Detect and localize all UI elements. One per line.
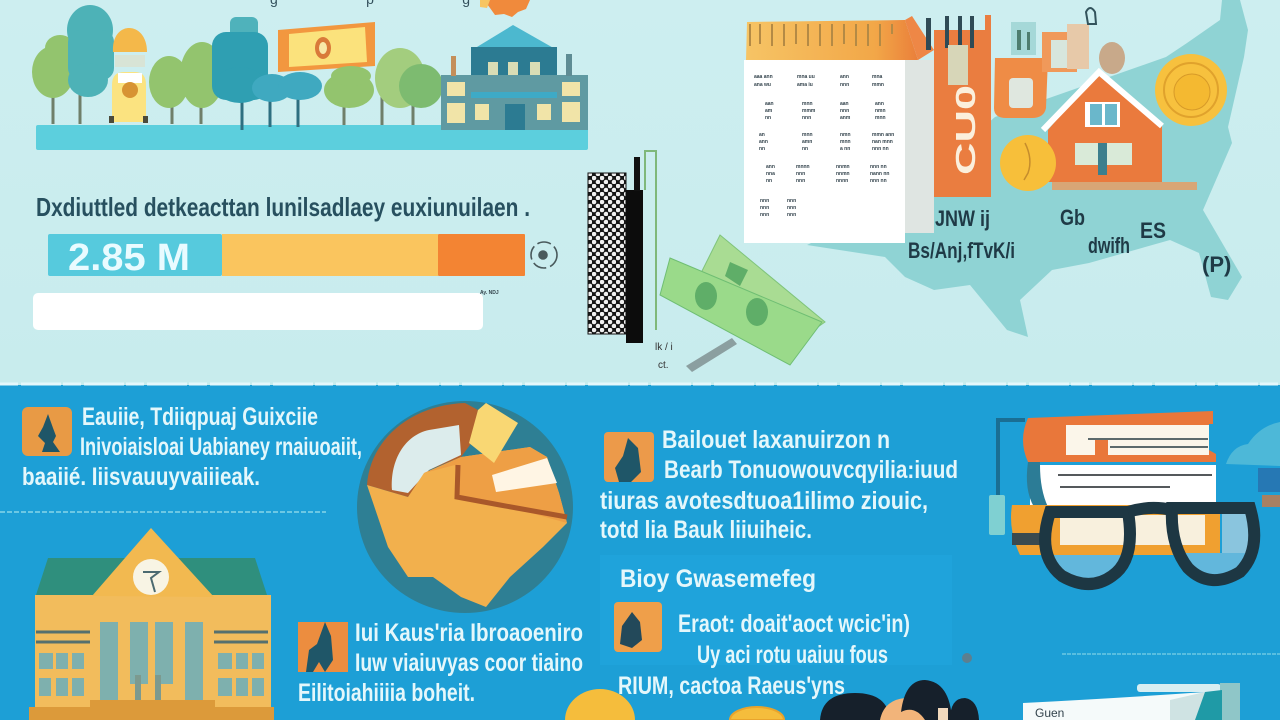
tree trunks <box>53 90 413 130</box>
text: Uy aci rotu uaiuu fous <box>697 641 888 669</box>
icon: orange gear <box>480 0 530 17</box>
bar value: 2.85 M <box>68 237 190 279</box>
text: Eraot: doait'aoct wcic'in) <box>678 610 910 638</box>
calendar table text: nnn <box>787 198 796 204</box>
white book <box>1027 462 1216 507</box>
map labels: Gb <box>1060 205 1085 230</box>
text: Bearb Tonuowouvcqyilia:iuud <box>664 456 958 484</box>
school roof <box>36 558 267 595</box>
calendar table text: ann <box>766 164 775 170</box>
text: tiuras avotesdtuoa1ilimo ziouic, <box>600 487 928 515</box>
panel: statistic bar <box>33 192 557 330</box>
calendar table text: nn <box>759 146 765 152</box>
calendar table text: nmn <box>875 108 886 114</box>
calendar table text: nnn <box>760 198 769 204</box>
calendar table text: nnn <box>787 205 796 211</box>
heading: Dxdiuttled detkeacttan lunilsadlaey euxiunuilaen . <box>36 192 530 222</box>
small scribble circle: ct. <box>658 360 669 371</box>
small city icons <box>994 8 1125 118</box>
school pediment <box>92 528 214 597</box>
orange book <box>1023 411 1216 462</box>
teal shrub <box>252 72 322 102</box>
calendar table text: ama iu <box>797 82 813 88</box>
calendar table text: ann <box>840 74 849 80</box>
icon: small gold coin <box>1000 135 1056 191</box>
calendar table text: nnmn <box>836 164 850 170</box>
calendar table text: nnn <box>787 212 796 218</box>
ground band <box>36 125 588 150</box>
text: Bailouet laxanuirzon n <box>662 426 890 454</box>
text: Inivoiaisloai Uabianey rnaiuoaiit, <box>80 433 362 461</box>
icon: open book bottom right <box>1023 683 1240 720</box>
icon: circular arrows <box>531 242 557 268</box>
calendar table text: nnn <box>840 82 849 88</box>
map labels: dwifh <box>1088 233 1130 258</box>
icon: dollar bills <box>660 235 825 365</box>
icon: badge <box>614 602 662 652</box>
calendar table text: nan mnn <box>872 139 893 145</box>
orange bookmark column: CU0 <box>950 85 981 175</box>
calendar table text: am <box>765 108 773 114</box>
text: baaiié. Iiisvauuyvaiiieak. <box>22 463 260 491</box>
map labels <box>908 205 1231 277</box>
calendar table text: amn <box>802 139 812 145</box>
small bar note: Ay. NDJ <box>480 290 499 296</box>
building <box>441 25 588 130</box>
text: Eilitoiahiiiia boheit. <box>298 679 475 707</box>
white bar <box>33 293 483 330</box>
icon: cloud <box>1226 422 1280 507</box>
map labels: ES <box>1140 218 1166 243</box>
panel: calendar <box>744 20 934 243</box>
orange book lower <box>1011 505 1220 555</box>
calendar table text: ana wu <box>754 82 771 88</box>
calendar table text: mnn <box>802 101 813 107</box>
text: Iuw viaiuvyas coor tiaino <box>355 649 583 677</box>
calendar table text: nnn <box>840 108 849 114</box>
icon: people <box>820 680 979 720</box>
calendar table text: nnn <box>796 171 805 177</box>
panel: text block one <box>22 403 362 491</box>
glasses <box>1045 508 1255 585</box>
calendar table text: mnn <box>875 115 886 121</box>
school base <box>29 700 274 720</box>
callout background <box>600 555 952 665</box>
panel: text block three <box>298 619 583 707</box>
icon: large gold coin <box>1155 54 1227 126</box>
text: Eauiie, Tdiiqpuaj Guixciie <box>82 403 318 431</box>
panel: landscape illustration <box>32 0 588 150</box>
map of the United States <box>807 0 1248 337</box>
calendar table text: nnn <box>796 178 805 184</box>
section edge <box>0 382 1280 386</box>
school door <box>135 675 161 705</box>
bottom section background <box>0 385 1280 720</box>
icon: grey dot <box>962 653 972 663</box>
calendar table text: mna <box>872 74 882 80</box>
calendar table text: mmm <box>802 108 816 114</box>
banknote sign <box>278 22 375 72</box>
calendar table text: mnn <box>840 139 851 145</box>
calendar page <box>744 60 905 243</box>
calendar table text <box>754 74 894 218</box>
icon: globe with orange map <box>357 401 573 613</box>
graduation tassel <box>989 420 1025 535</box>
calendar table text: aaa ann <box>754 74 773 80</box>
calendar table text: mmn <box>872 82 884 88</box>
calendar table text: nann nn <box>870 171 889 177</box>
teal tree left <box>67 5 114 97</box>
calendar table text: nnn nn <box>870 178 887 184</box>
teal tree middle <box>212 17 268 103</box>
icon: orange house <box>1043 70 1197 190</box>
icon: pencil <box>686 338 737 372</box>
map labels: (P) <box>1202 252 1231 277</box>
calendar header <box>746 20 918 60</box>
calendar table text: aan <box>765 101 774 107</box>
text: RIUM, cactoa Raeus'yns <box>618 672 845 700</box>
green trees right <box>324 48 443 108</box>
calendar table text: anm <box>840 115 851 121</box>
icon: gold coins <box>565 689 784 720</box>
dashed divider right <box>1062 653 1280 655</box>
panel: lighter callout <box>600 555 952 700</box>
calendar table text: nn <box>766 178 772 184</box>
calendar table text: ann <box>875 101 884 107</box>
calendar table text: nnn <box>802 115 811 121</box>
calendar table text: nna <box>766 171 775 177</box>
calendar table text: nn <box>765 115 771 121</box>
dashed divider left <box>0 511 326 513</box>
panel: school building <box>29 528 274 720</box>
calendar table text: an <box>759 132 765 138</box>
school ledges <box>36 632 268 642</box>
stacked bar <box>48 234 525 276</box>
calendar binding <box>750 24 892 46</box>
icon: clock <box>133 559 169 595</box>
calendar table text: nn <box>802 146 808 152</box>
panel: books and glasses <box>989 411 1280 585</box>
calendar table text: nnnn <box>836 178 848 184</box>
chart: black and green columns <box>588 151 656 343</box>
panel: text block two <box>600 426 958 544</box>
green trees left <box>32 35 224 108</box>
icon: open book bottom right: Guen <box>1035 706 1064 720</box>
calendar table text: nnn nn <box>872 146 889 152</box>
calendar table text: nnn <box>760 205 769 211</box>
map labels: Bs/Anj,fTvK/i <box>908 238 1015 263</box>
orange bookmark column <box>905 15 991 197</box>
yellow car sign <box>109 28 148 123</box>
icon: people badge <box>298 622 348 672</box>
calendar table text: nnn nn <box>870 164 887 170</box>
calendar table text: mnn <box>802 132 813 138</box>
text: Iui Kaus'ria Ibroaoeniro <box>355 619 583 647</box>
small scribble label: lk / i <box>655 342 673 353</box>
icon: figure badge <box>604 432 654 482</box>
calendar table text: nmn <box>840 132 851 138</box>
callout heading: Bioy Gwasemefeg <box>620 565 816 593</box>
icon: silhouette badge <box>22 407 72 456</box>
calendar table text: mna uu <box>797 74 815 80</box>
school windows <box>39 622 264 702</box>
top section background <box>0 0 1280 385</box>
calendar table text: aan <box>840 101 849 107</box>
calendar page shadow <box>903 60 934 233</box>
calendar table text: mnnn <box>796 164 810 170</box>
calendar table text: nnn <box>760 212 769 218</box>
calendar table text: a nn <box>840 146 850 152</box>
text: totd lia Bauk liiuiheic. <box>600 516 812 544</box>
school body <box>35 595 271 710</box>
map labels: JNW ij <box>935 206 990 231</box>
calendar table text: nnmn <box>836 171 850 177</box>
calendar table text: mmn ann <box>872 132 894 138</box>
calendar table text: ann <box>759 139 768 145</box>
